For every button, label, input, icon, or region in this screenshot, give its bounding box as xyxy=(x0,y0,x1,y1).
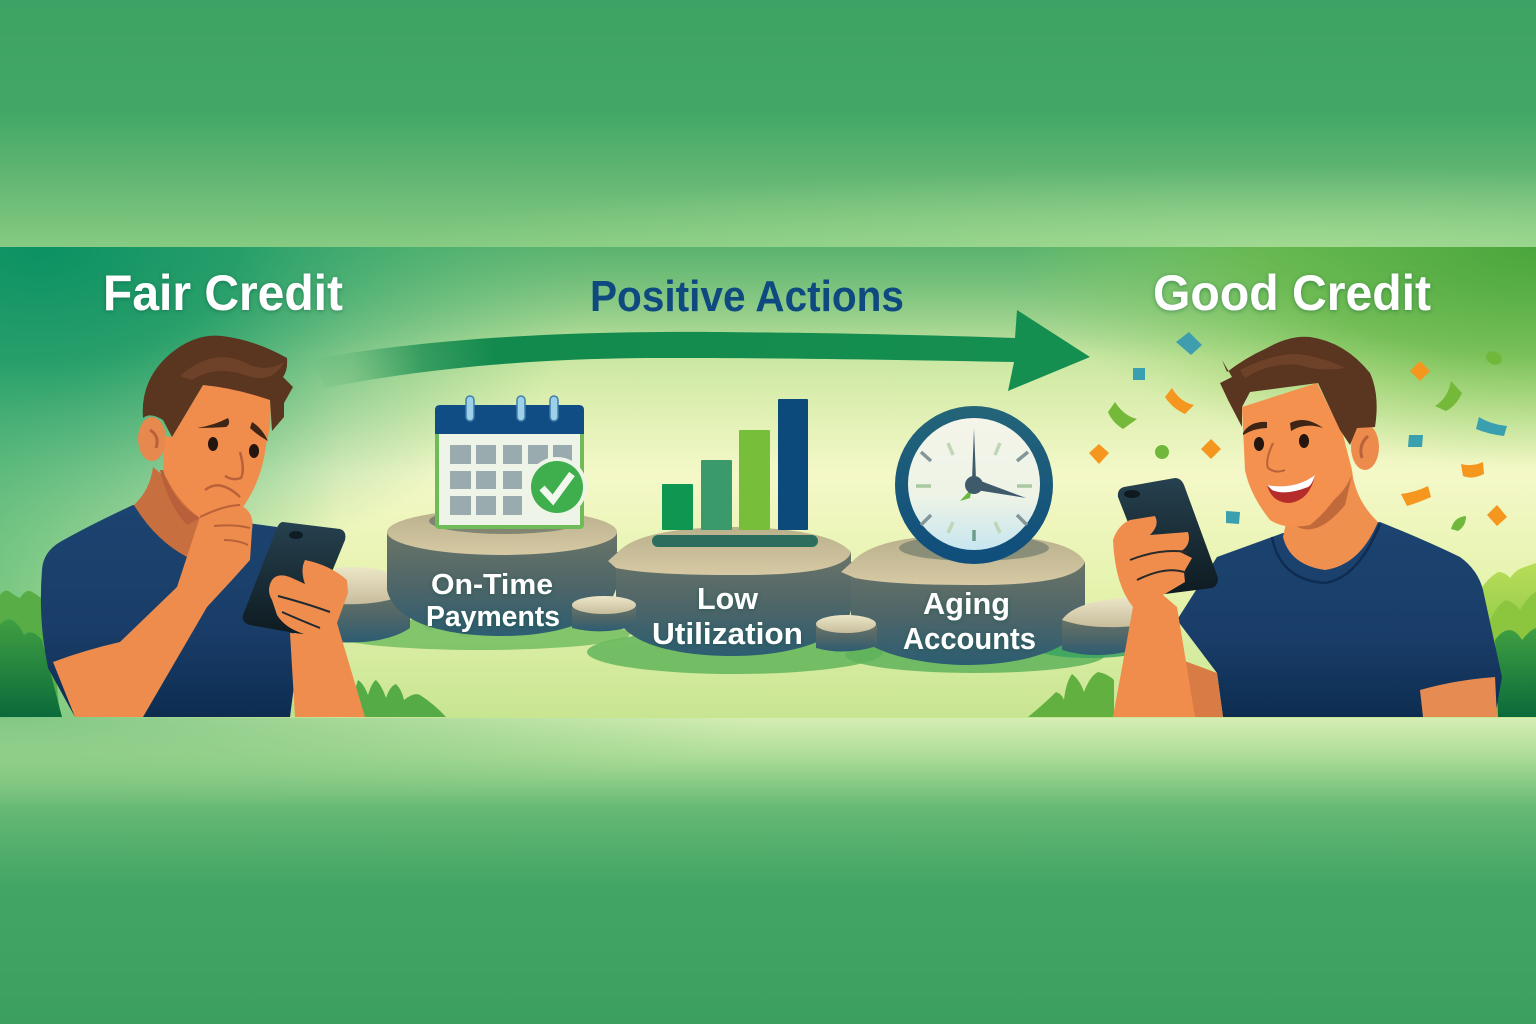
bushes: centre left xyxy=(352,680,446,717)
hand and arm xyxy=(1113,516,1195,717)
stone pedestal 1 xyxy=(387,508,617,636)
panel: illustration banner xyxy=(0,247,1536,718)
bushes: right xyxy=(1480,563,1536,717)
person: happy man with phone xyxy=(1113,337,1502,717)
face xyxy=(1242,383,1352,527)
icon: clock xyxy=(895,406,1053,564)
ear xyxy=(138,417,166,461)
label: Aging Accounts: Accounts xyxy=(903,621,1036,656)
bushes: centre right xyxy=(1028,672,1114,717)
nose xyxy=(1267,443,1285,472)
arm raised to chin xyxy=(53,505,252,717)
label: On-Time Payments: On-Time xyxy=(431,569,553,601)
label: Low Utilization xyxy=(652,581,803,651)
heading: Fair Credit: Fair Credit xyxy=(103,265,343,321)
neck xyxy=(1283,470,1378,570)
icon: calendar with check xyxy=(435,396,587,529)
stone pedestal 2 xyxy=(608,527,851,656)
person: worried man with phone xyxy=(41,336,365,717)
smile xyxy=(1267,475,1315,503)
label: Low Utilization: Low xyxy=(697,581,759,616)
neck xyxy=(134,467,200,557)
label: On-Time Payments xyxy=(426,569,560,633)
label: Low Utilization: Utilization xyxy=(652,616,803,651)
sleeve arm xyxy=(1420,677,1497,717)
top green band xyxy=(0,0,1536,247)
collar xyxy=(1272,524,1380,583)
pebble: between 1 and 2 xyxy=(572,596,636,631)
pebble: far left xyxy=(335,567,410,642)
heading: Good Credit: Good Credit xyxy=(1153,265,1431,321)
chart: rising bars xyxy=(652,399,818,547)
ear xyxy=(1351,424,1379,470)
bushes: left xyxy=(0,591,62,717)
bottom green band xyxy=(0,718,1536,1024)
hair xyxy=(143,336,293,437)
label: Aging Accounts xyxy=(903,586,1036,656)
stone pedestal 3 xyxy=(841,535,1085,665)
label: On-Time Payments: Payments xyxy=(426,601,560,633)
nose and mouth xyxy=(205,452,243,497)
hair xyxy=(1220,337,1377,445)
arrow: progress xyxy=(310,310,1090,391)
face xyxy=(163,385,270,518)
eyebrows xyxy=(1243,420,1323,435)
shirt xyxy=(1177,522,1502,717)
pebble: far right xyxy=(1062,597,1135,655)
eyes xyxy=(208,437,259,458)
shirt xyxy=(41,505,298,717)
phone xyxy=(243,522,345,635)
eyebrows xyxy=(197,418,268,441)
label: Aging Accounts: Aging xyxy=(923,586,1010,621)
forearm back xyxy=(1182,660,1223,717)
heading: Positive Actions: Positive Actions xyxy=(590,272,904,321)
infographic canvas xyxy=(0,122,1536,876)
confetti xyxy=(1089,332,1507,531)
eyes xyxy=(1254,434,1309,451)
phone xyxy=(1118,478,1218,595)
hand on phone xyxy=(269,560,365,717)
ground shadows under stones xyxy=(330,618,1145,674)
pebble: between 2 and 3 xyxy=(816,615,877,652)
